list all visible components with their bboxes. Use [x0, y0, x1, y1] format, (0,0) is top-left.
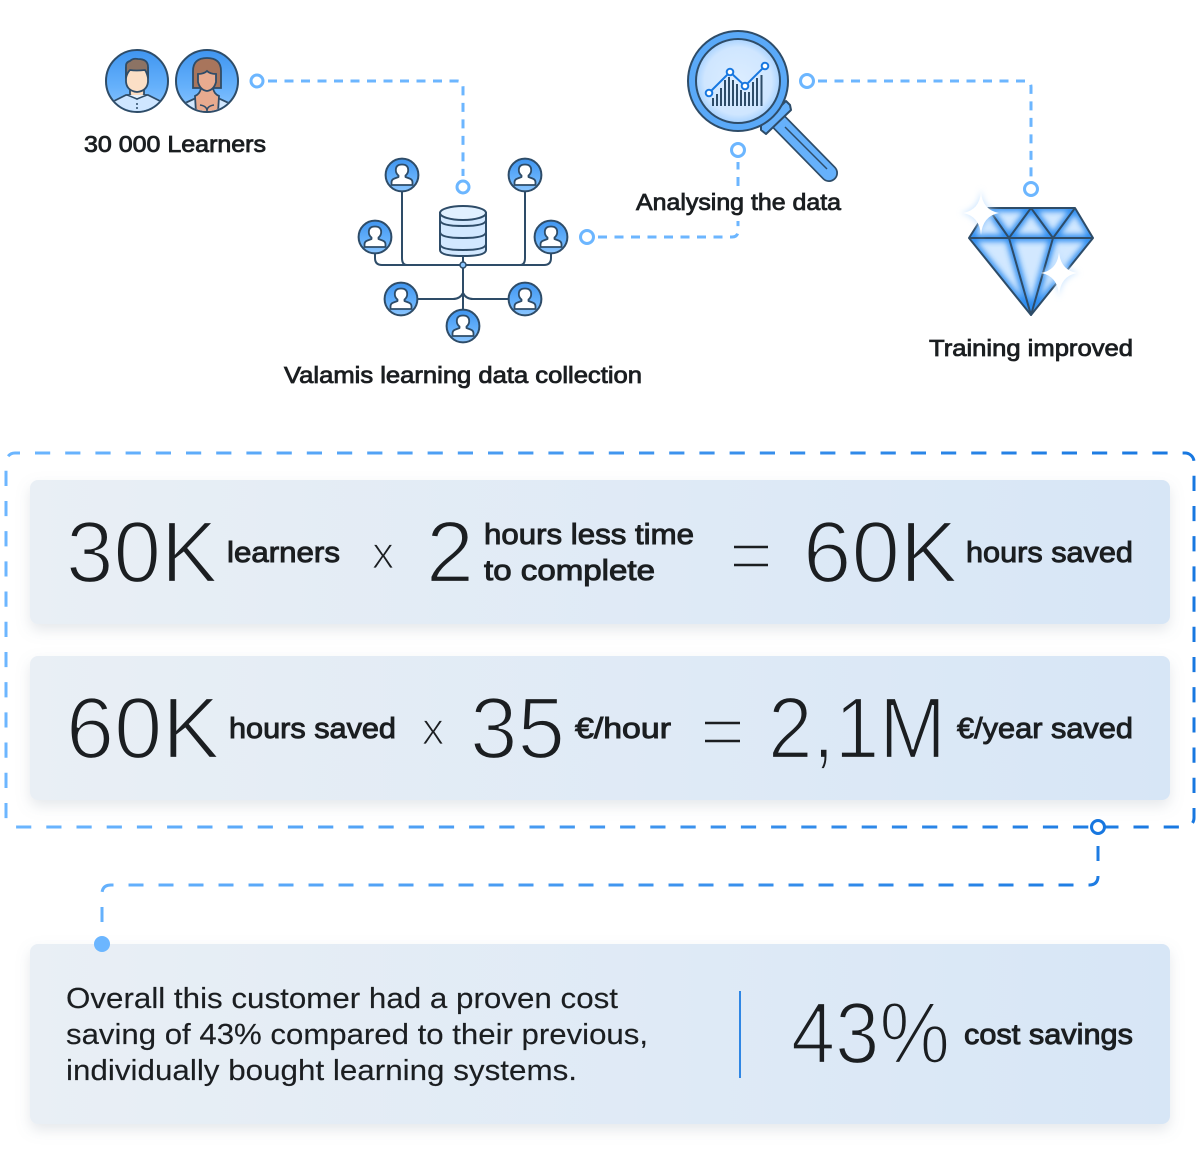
icon: sparkle left	[960, 188, 1002, 239]
connector: calculations to conclusion	[94, 820, 1104, 952]
icon: male learner	[106, 50, 168, 114]
panel: learners calculation: 60K	[803, 504, 958, 601]
panel: hours saved calculation: 2,1M	[768, 680, 946, 777]
text: summary: saving of 43% compared to their previous,	[66, 1019, 648, 1051]
panel: learners calculation	[30, 480, 1170, 624]
equals sign	[705, 723, 740, 741]
label: data collection: Valamis learning data collection	[284, 362, 642, 388]
connector: learners to data collection	[251, 75, 469, 193]
icon: sparkle right	[1038, 248, 1080, 299]
panel: learners calculation: hours saved	[966, 537, 1133, 569]
panel: learners calculation: 30K	[66, 504, 218, 601]
panel: learners calculation: X	[372, 538, 394, 576]
panel: learners calculation: hours less time	[484, 519, 694, 551]
panel: learners calculation: to complete	[484, 555, 655, 587]
label: analysing: Analysing the data	[636, 189, 841, 215]
label: training improved: Training improved	[929, 335, 1133, 361]
panel: hours saved calculation: 60K	[66, 680, 220, 777]
text: summary: Overall this customer had a proven cost	[66, 983, 618, 1015]
panel: hours saved calculation: 35	[470, 680, 565, 777]
panel: overall savings: cost savings	[964, 1019, 1133, 1051]
equals sign	[734, 547, 768, 565]
panel: hours saved calculation: €/hour	[575, 713, 671, 745]
label: learners: 30 000 Learners	[84, 131, 266, 157]
icon: magnifying glass with chart	[688, 31, 829, 173]
connector: analysis to training	[800, 74, 1038, 196]
icon: database	[440, 206, 486, 256]
connector: data collection to analysis	[580, 144, 744, 244]
panel: learners calculation: learners	[227, 537, 340, 569]
panel: hours saved calculation: €/year saved	[957, 713, 1133, 745]
panel: overall savings: 43%	[791, 985, 950, 1082]
panel: hours saved calculation	[30, 656, 1170, 800]
panel: hours saved calculation: X	[422, 714, 444, 752]
panel: hours saved calculation: hours saved	[229, 713, 396, 745]
text: summary	[66, 983, 648, 1087]
text: summary: individually bought learning systems.	[66, 1055, 577, 1087]
panel: learners calculation: 2	[426, 504, 474, 601]
dashed frame around calculations	[6, 453, 1194, 827]
panel: overall savings	[30, 944, 1170, 1124]
icon: female learner	[176, 50, 238, 114]
divider	[739, 991, 741, 1078]
icon: diamond	[960, 188, 1093, 315]
icon: learning data network	[359, 159, 567, 342]
